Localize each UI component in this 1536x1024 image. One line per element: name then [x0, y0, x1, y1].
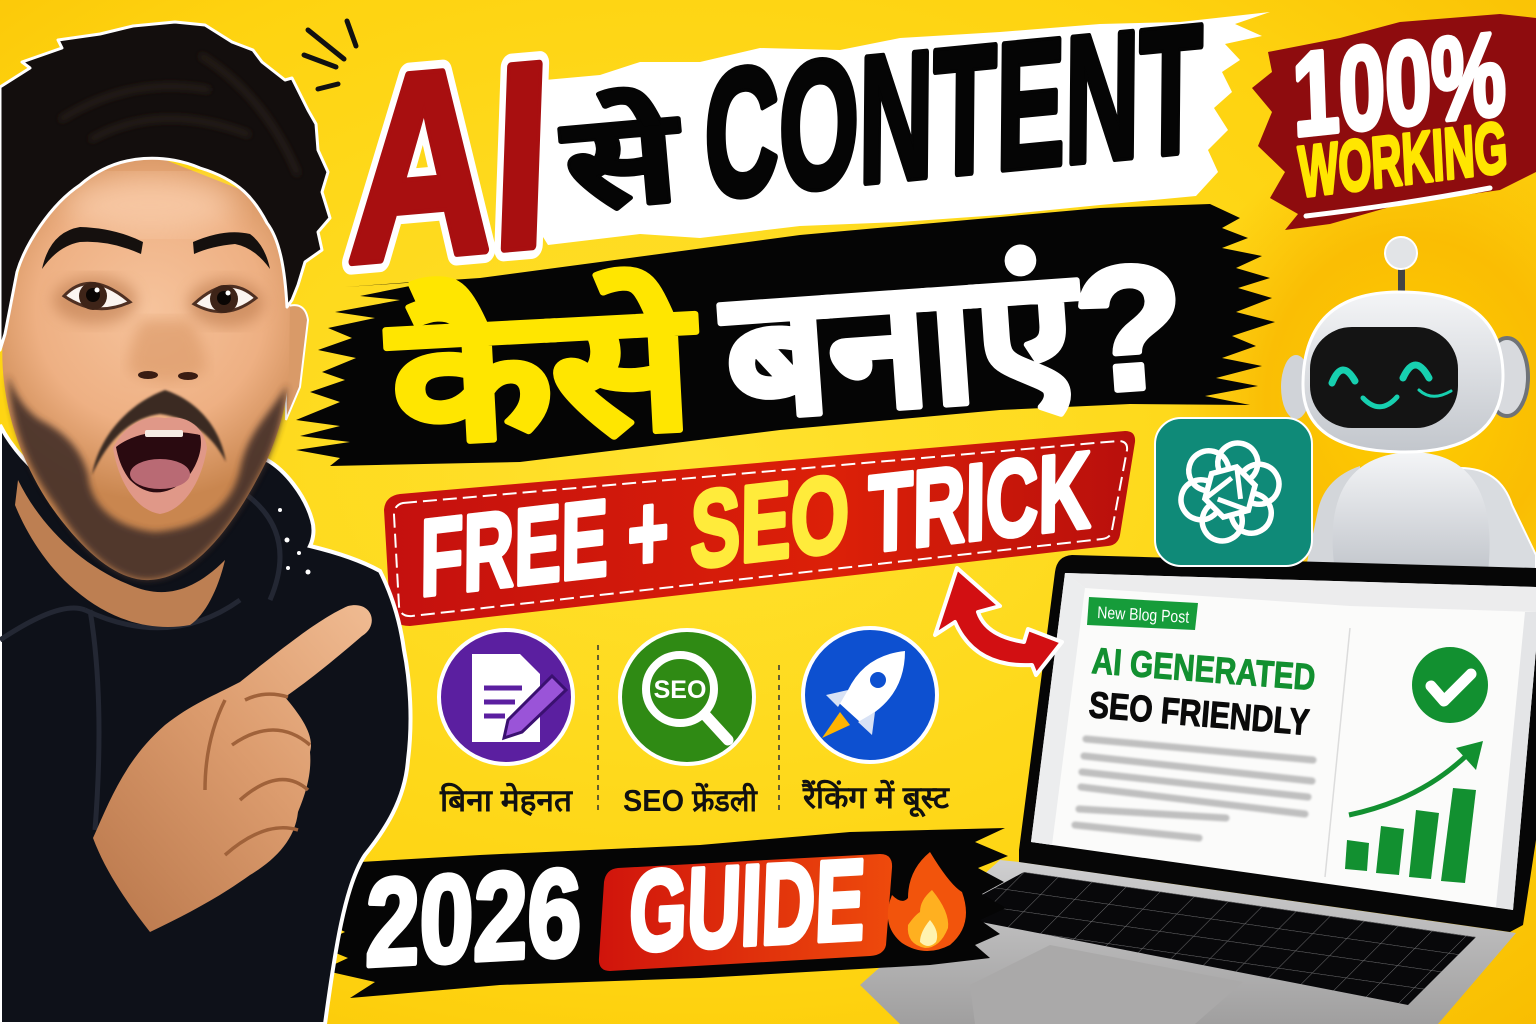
keyboard	[945, 872, 1476, 1005]
forehead highlight	[65, 177, 235, 233]
face	[2, 150, 290, 580]
tag: New Blog Post	[1087, 597, 1198, 630]
label: बिना मेहनत	[439, 782, 573, 818]
beard	[8, 375, 287, 580]
icon: fire	[888, 852, 966, 951]
icon: SEO magnifier: SEO	[654, 676, 706, 704]
sparkles	[278, 508, 310, 574]
dashed divider	[597, 645, 599, 815]
bottom black band	[316, 828, 1008, 998]
top right badge	[1252, 8, 1536, 230]
finger creases	[205, 694, 310, 855]
title word: se: से	[557, 84, 688, 235]
text: SEO FRIENDLY: SEO FRIENDLY	[1087, 684, 1311, 743]
label: SEO फ्रेंडली	[623, 782, 758, 818]
guide pill	[599, 854, 892, 971]
right scroll edge	[1496, 612, 1536, 910]
burst marks	[304, 21, 356, 89]
hair	[0, 22, 330, 350]
feature: ranking boost	[801, 628, 950, 818]
banner shape	[384, 431, 1135, 626]
panel divider	[1325, 628, 1350, 877]
eye socket shading	[53, 276, 264, 327]
growth arrow	[1349, 741, 1483, 815]
title word: AI: AI	[345, 6, 555, 318]
robot head	[1303, 292, 1503, 452]
black brush band	[296, 204, 1275, 466]
robot right arm	[1460, 468, 1536, 572]
text: TRICK: TRICK	[868, 428, 1091, 575]
knot logo	[1173, 432, 1287, 552]
laptop base	[860, 860, 1516, 1024]
robot	[1281, 237, 1536, 572]
icon: ChatGPT tile	[1155, 418, 1312, 566]
chart: growth bars	[1345, 788, 1476, 883]
laptop lid	[1019, 555, 1536, 932]
title word: kaise: कैसे	[383, 265, 704, 480]
badge brush	[1252, 14, 1536, 230]
left eye	[64, 282, 130, 310]
text: GUIDE: GUIDE	[627, 837, 867, 976]
red curved arrow	[935, 568, 1062, 675]
badge underline	[1306, 188, 1490, 216]
eyebrows	[42, 227, 270, 269]
nose	[128, 320, 206, 382]
browser toolbar	[1065, 573, 1536, 612]
text: FREE +: FREE +	[420, 469, 669, 619]
ear	[285, 305, 308, 420]
icon: rocket	[803, 628, 937, 762]
bottom guide label	[365, 837, 966, 993]
robot backdrop glow	[1170, 130, 1536, 670]
person	[0, 22, 411, 1024]
antenna	[1385, 237, 1417, 294]
title word: AI: AI	[345, 6, 555, 318]
banner stitching	[394, 441, 1127, 616]
dashed divider	[778, 665, 780, 815]
browser sidebar	[1031, 573, 1085, 845]
mouth	[113, 417, 207, 514]
text: AI GENERATED: AI GENERATED	[1090, 640, 1317, 698]
title	[345, 0, 1203, 480]
robot ears	[1486, 338, 1528, 416]
laptop screen	[1031, 573, 1536, 910]
red banner	[384, 428, 1135, 626]
text: SEO: SEO	[690, 452, 850, 591]
blurred article lines	[1075, 739, 1313, 838]
robot body	[1333, 452, 1490, 572]
moustache	[92, 390, 226, 475]
right eye	[194, 285, 256, 313]
icon: green check	[1412, 647, 1488, 723]
white brush band	[520, 12, 1270, 245]
icon: SEO magnifier	[620, 630, 754, 764]
hood highlight	[0, 490, 280, 830]
label: रैंकिंग में बूस्ट	[801, 779, 950, 818]
text: 2026: 2026	[365, 844, 583, 993]
robot left arm	[1305, 466, 1360, 572]
feature: bina mehnat	[439, 630, 573, 818]
pointing hand	[93, 605, 372, 932]
hoodie	[0, 425, 411, 1024]
title word: banayein: बनाएं?	[716, 227, 1192, 455]
neck	[15, 480, 225, 627]
trackpad	[970, 945, 1243, 1024]
robot visor	[1310, 327, 1458, 428]
laptop	[860, 555, 1536, 1024]
robot face	[1332, 365, 1451, 407]
icon: document pencil	[439, 630, 573, 764]
feature: SEO friendly	[620, 630, 758, 818]
tag: New Blog Post: New Blog Post	[1097, 603, 1190, 627]
